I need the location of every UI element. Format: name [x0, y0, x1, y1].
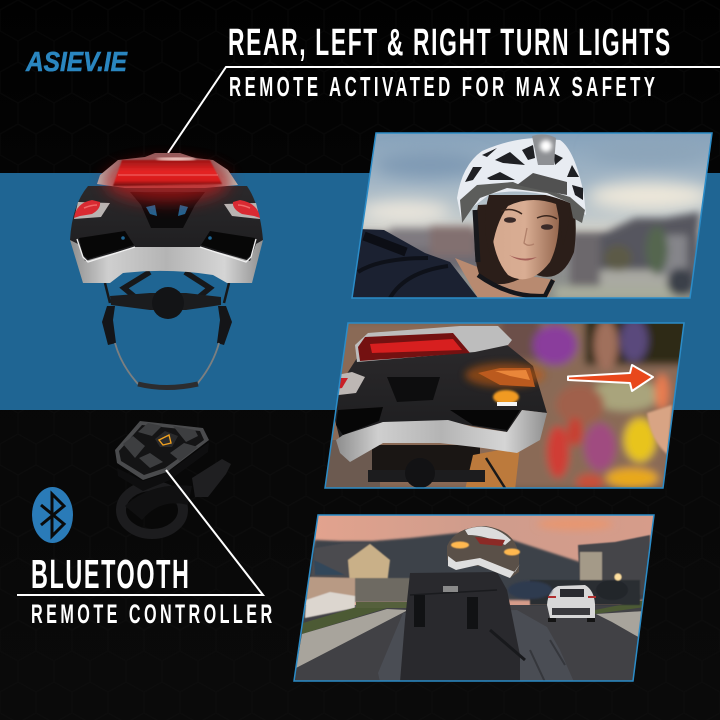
black shell: [70, 186, 263, 261]
strap: [121, 459, 231, 534]
helmet top silver: [355, 326, 512, 362]
helmet rear view: [70, 153, 263, 388]
red glow: [105, 162, 229, 202]
title: REAR, LEFT & RIGHT TURN LIGHTS: [228, 21, 670, 63]
chin strap: [478, 275, 553, 296]
remote controller: [115, 421, 231, 534]
face: [491, 197, 559, 279]
hair back: [475, 200, 576, 284]
subtitle: REMOTE ACTIVATED FOR MAX SAFETY: [229, 71, 655, 102]
mountains: [300, 533, 660, 600]
side lights: [74, 200, 260, 219]
lower vents: [77, 231, 256, 262]
headlight: [532, 134, 556, 165]
lawn and sidewalk: [296, 600, 645, 668]
photo 3: rider on street at dusk: [290, 515, 660, 690]
hair front: [486, 195, 564, 242]
arrow: [568, 365, 653, 391]
silver lower shell: [70, 240, 263, 283]
cycling helmet: [457, 134, 586, 223]
logo: ASIEV.IE: [25, 46, 128, 77]
centre vent: [130, 192, 205, 228]
neck and shoulder: [455, 258, 555, 298]
parked cars: [508, 581, 552, 599]
body: [117, 442, 209, 491]
top shell: [97, 153, 238, 188]
remote controller label: REMOTE CONTROLLER: [31, 599, 272, 629]
bluetooth heading: BLUETOOTH: [31, 552, 189, 598]
harness and chin strap: [102, 272, 232, 388]
helmet black shell: [330, 345, 547, 440]
red brake light: [113, 160, 222, 186]
leader line: helmet to title: [168, 67, 720, 153]
jacket and backpack: [348, 229, 478, 298]
bluetooth icon: [32, 487, 73, 543]
photo 1: woman with headlight helmet: [340, 133, 720, 300]
helmet silver lower shell: [336, 410, 547, 462]
bokeh background: [332, 324, 683, 488]
rider jacket: [378, 610, 574, 682]
hazard button: [155, 431, 178, 447]
left houses: [305, 543, 415, 618]
rider helmet: [447, 526, 520, 578]
orange light streak: [462, 358, 548, 406]
photo 2: turn signal close-up: [320, 315, 690, 490]
red light bar: [358, 333, 470, 361]
clouds: [364, 151, 704, 226]
road: [294, 605, 642, 680]
rear strap area: [320, 440, 520, 490]
hazard icon: [159, 435, 171, 445]
vents: [336, 377, 520, 435]
leader line: remote to label: [17, 470, 263, 595]
left side light: [338, 372, 365, 395]
right houses: [530, 535, 650, 605]
buttons: [123, 423, 198, 468]
blue band: [0, 173, 720, 410]
eyes, brows, nose, mouth: [501, 210, 557, 261]
blurred town: [360, 212, 700, 300]
backpack: [400, 572, 525, 682]
white car: [547, 585, 596, 622]
hand: [647, 405, 672, 455]
